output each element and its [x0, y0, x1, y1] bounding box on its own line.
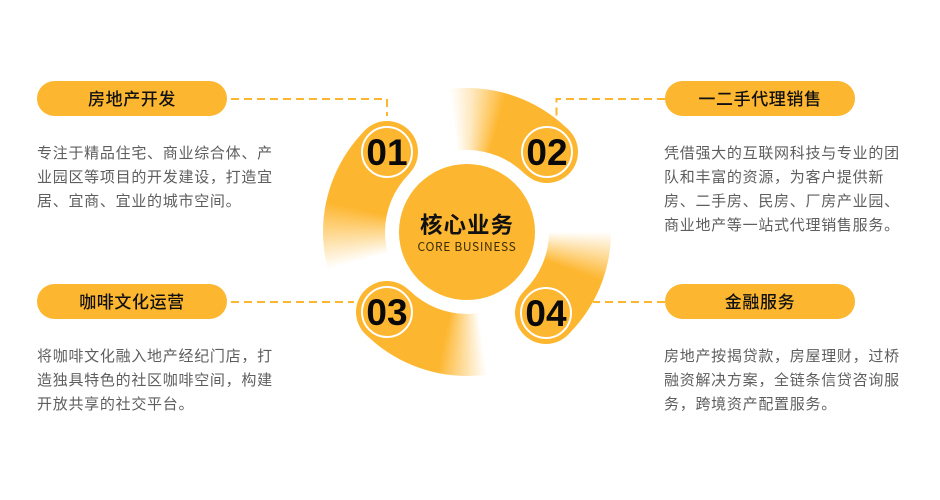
text block: financial services: 融资解决方案，全链条信贷咨询服	[664, 369, 900, 390]
text block: agency sales: 房、二手房、民房、厂房产业园、	[664, 190, 900, 211]
text block: real estate development: 专注于精品住宅、商业综合体、产	[37, 142, 273, 163]
text block: real estate development: 业园区等项目的开发建设，打造宜	[37, 166, 273, 187]
text block: agency sales: 商业地产等一站式代理销售服务。	[664, 214, 900, 235]
center title: 核心业务	[420, 208, 514, 240]
text block: financial services: 房地产按揭贷款，房屋理财，过桥	[664, 345, 900, 366]
ring of four fading arcs	[323, 88, 611, 376]
pill heading: second-hand agency sales: 一二手代理销售	[698, 85, 822, 110]
pill heading: financial services	[665, 284, 855, 319]
pill heading: coffee culture operations	[37, 284, 227, 319]
pill heading: coffee culture operations: 咖啡文化运营	[79, 288, 185, 313]
text block: financial services: 务，跨境资产配置服务。	[664, 393, 837, 414]
pill heading: real estate development	[37, 81, 227, 116]
badge 01	[356, 121, 418, 183]
text block: real estate development	[37, 142, 273, 211]
text block: agency sales	[664, 142, 900, 235]
center subtitle: CORE BUSINESS	[418, 238, 516, 254]
pill heading: financial services: 金融服务	[725, 288, 795, 313]
text block: agency sales: 队和丰富的资源，为客户提供新	[664, 166, 884, 187]
text block: coffee culture	[37, 345, 273, 414]
badge 03: 03	[366, 292, 408, 333]
badge 04: 04	[525, 293, 567, 334]
text block: coffee culture: 开放共享的社交平台。	[37, 393, 194, 414]
text block: financial services	[664, 345, 900, 414]
pill heading: real estate development: 房地产开发	[88, 85, 176, 110]
text block: coffee culture: 造独具特色的社区咖啡空间，构建	[37, 369, 273, 390]
central circle: core business	[399, 164, 535, 300]
pill heading: second-hand agency sales	[665, 81, 855, 116]
badge 02: 02	[526, 132, 568, 173]
text block: real estate development: 居、宜商、宜业的城市空间。	[37, 190, 241, 211]
badge 04	[515, 282, 577, 344]
badge 01: 01	[366, 132, 408, 173]
badge 03	[356, 281, 418, 343]
badge 02	[516, 121, 578, 183]
text block: agency sales: 凭借强大的互联网科技与专业的团	[664, 142, 900, 163]
text block: coffee culture: 将咖啡文化融入地产经纪门店，打	[37, 345, 273, 366]
